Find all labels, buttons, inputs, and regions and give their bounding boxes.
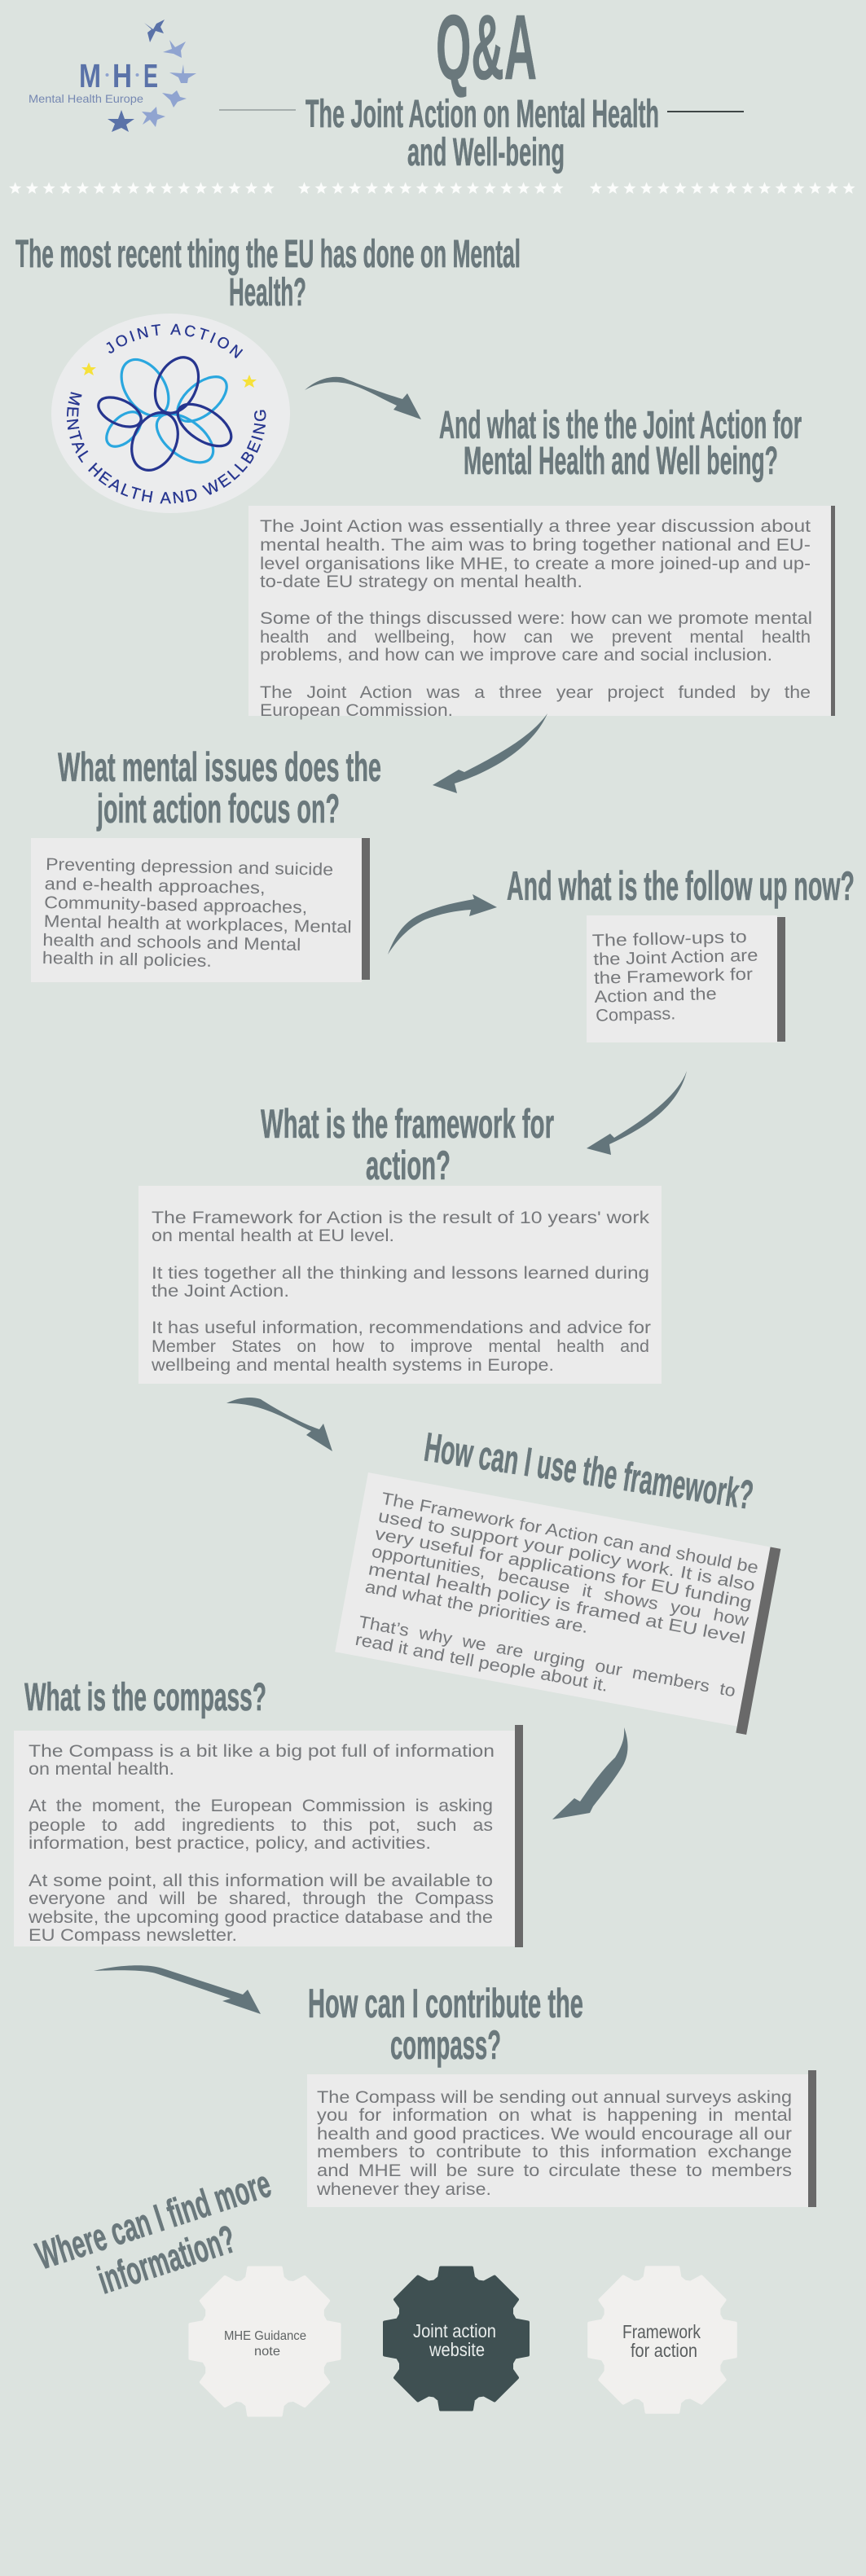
icon: dark star — [108, 110, 134, 132]
panel: compass answer: website, the upcoming good practice database and the — [28, 1908, 493, 1927]
panel: contributing answer: health and good practices. We would encourage all our — [317, 2125, 792, 2144]
panel: follow up answer: Action and the — [594, 985, 717, 1007]
panel: using the framework answer: The Framework for Action can and should be — [380, 1490, 760, 1578]
panel: mental issues answer: Preventing depression and suicide — [46, 855, 333, 880]
icon: light star 4 — [142, 107, 165, 127]
panel: using the framework answer: That’s why we are urging our members to — [357, 1613, 737, 1701]
panel: contributing answer: members to contribute to this information exchange — [317, 2143, 792, 2161]
panel: follow up answer: Compass. — [596, 1004, 676, 1025]
heading: where can I find more information: Where can I find more — [31, 2162, 276, 2278]
arrow: logo to Joint Action — [305, 377, 421, 419]
panel: Joint Action answer: mental health. The aim was to bring together national and EU- — [260, 536, 811, 555]
panel: contributing answer — [307, 2070, 816, 2207]
panel: mental issues answer: health and schools and Mental — [42, 931, 301, 954]
subtitle — [219, 93, 744, 174]
logo letters: E — [143, 57, 158, 94]
panel: compass answer — [14, 1725, 523, 1947]
panel: framework answer — [138, 1186, 662, 1384]
logo letters: H — [112, 57, 132, 94]
heading: how can I contribute: compass? — [390, 2022, 501, 2068]
panel: compass answer: The Compass is a bit like a big pot full of information — [29, 1742, 495, 1761]
panel: framework answer: It has useful information, recommendations and advice for — [152, 1319, 651, 1337]
heading: where can I find more information — [31, 2162, 276, 2302]
gear: MHE Guidance note: note — [254, 2345, 280, 2359]
panel: contributing answer: The Compass will be sending out annual surveys asking — [317, 2088, 792, 2107]
panel: using the framework answer — [334, 1472, 780, 1735]
gear: MHE Guidance note: MHE Guidance — [224, 2329, 306, 2343]
heading: framework for action: action? — [366, 1143, 451, 1188]
panel: using the framework answer: mental health policy is framed at EU level — [367, 1560, 747, 1648]
heading: most recent thing — [15, 233, 521, 314]
panel: compass answer: information, best practice, policy, and activities. — [29, 1834, 431, 1853]
logo letters: M — [79, 57, 101, 94]
arrow: to compass — [552, 1727, 628, 1819]
panel: framework answer: wellbeing and mental health systems in Europe. — [151, 1356, 554, 1375]
panel: mental issues answer: and e-health approaches, — [44, 875, 266, 897]
panel: follow up answer — [587, 915, 785, 1042]
panel: using the framework answer: and what the priorities are. — [363, 1578, 590, 1637]
gear: Joint action website: Joint action — [413, 2320, 496, 2341]
heading: how can I contribute — [308, 1981, 583, 2068]
gear: Joint action website: website — [429, 2339, 485, 2360]
panel: framework answer: on mental health at EU level. — [152, 1227, 394, 1245]
gear: Joint action website — [385, 2267, 528, 2409]
panel: follow up answer: the Framework for — [594, 965, 753, 988]
panel: Joint Action answer: health and wellbeing, how can we prevent mental health — [260, 628, 811, 647]
arrow: to using the framework — [226, 1398, 332, 1451]
icon: bird — [144, 20, 165, 42]
heading: mental issues: What mental issues does the — [58, 744, 381, 790]
logo: Mental Health Europe — [29, 20, 196, 132]
panel: framework answer: Member States on how to improve mental health and — [152, 1337, 649, 1356]
arrow: to mental issues — [433, 713, 547, 793]
panel: Joint Action answer: Some of the things discussed were: how can we promote mental — [260, 609, 812, 628]
panel: compass answer: on mental health. — [29, 1760, 174, 1779]
panel: compass answer: At the moment, the European Commission is asking — [29, 1797, 493, 1815]
heading: mental issues: joint action focus on? — [96, 786, 340, 832]
panel: Joint Action answer: to-date EU strategy on mental health. — [260, 573, 582, 591]
panel: using the framework answer: opportunities, because it shows you how — [370, 1543, 751, 1630]
panel: Joint Action answer: European Commission. — [260, 701, 453, 720]
panel: compass answer: everyone and will be shared, through the Compass — [29, 1889, 494, 1908]
panel: framework answer: the Joint Action. — [152, 1282, 289, 1301]
logo letters — [79, 57, 158, 94]
heading: where can I find more information: information? — [93, 2218, 241, 2302]
panel: using the framework answer: used to support your policy work. It is also — [376, 1507, 757, 1595]
panel: Joint Action answer: The Joint Action was a three year project funded by the — [260, 683, 811, 702]
logo name: Mental Health Europe — [29, 92, 143, 105]
icon: light star 3 — [162, 90, 187, 108]
panel: Joint Action answer: level organisations like MHE, to create a more joined-up and up- — [260, 555, 811, 573]
panel: using the framework answer: very useful for applications for EU funding — [373, 1525, 754, 1613]
panel: contributing answer: and MHE will be sure to circulate these to members — [317, 2161, 792, 2180]
heading: framework for action — [261, 1101, 554, 1188]
heading: most recent thing: Health? — [229, 271, 306, 314]
panel: framework answer: The Framework for Action is the result of 10 years' work — [152, 1209, 650, 1227]
heading: how can I contribute: How can I contribute the — [308, 1981, 583, 2026]
panel: Joint Action answer: The Joint Action was essentially a three year discussion about — [260, 517, 811, 536]
panel: follow up answer: The follow-ups to — [592, 928, 747, 950]
panel: using the framework answer: read it and tell people about it. — [354, 1630, 609, 1696]
panel: Joint Action answer: problems, and how can we improve care and social inclusion. — [260, 646, 772, 665]
panel: follow up answer: the Joint Action are — [593, 946, 758, 969]
icon: light star 2 — [169, 64, 196, 83]
star divider — [7, 182, 857, 195]
icon: light star 1 — [163, 40, 186, 58]
gear: Framework for action — [589, 2267, 736, 2412]
panel: compass answer: people to add ingredients to this pot, such as — [29, 1816, 493, 1835]
gear: MHE Guidance note — [190, 2268, 340, 2415]
heading: framework for action: What is the framework for — [261, 1101, 554, 1147]
panel: mental issues answer: health in all policies. — [42, 949, 212, 971]
gear: Framework for action: for action — [631, 2340, 697, 2361]
panel: compass answer: At some point, all this information will be available to — [29, 1872, 493, 1890]
arrow: to contributing — [94, 1965, 261, 2014]
panel: Joint Action answer — [248, 506, 835, 720]
arrow: to follow up — [388, 894, 497, 954]
badge: Joint Action logo: MENTAL HEALTH AND WELLBEING — [67, 392, 266, 503]
badge: Joint Action logo — [51, 314, 290, 513]
gear: Framework for action: Framework — [622, 2321, 701, 2342]
panel: compass answer: EU Compass newsletter. — [29, 1926, 237, 1945]
panel: mental issues answer: Community-based approaches, — [44, 893, 307, 917]
heading: what is the compass: What is the compass? — [24, 1676, 266, 1719]
subtitle: and Well-being — [407, 131, 565, 174]
heading: what is the Joint Action — [439, 404, 802, 483]
arrow: to framework — [587, 1071, 687, 1155]
badge: Joint Action logo: JOINT ACTION — [106, 324, 243, 358]
panel: mental issues answer — [31, 838, 370, 982]
panel: contributing answer: you for information on what is happening in mental — [317, 2106, 792, 2125]
panel: framework answer: It ties together all the thinking and lessons learned during — [152, 1264, 649, 1283]
panel: mental issues answer: Mental health at workplaces, Mental — [44, 912, 352, 937]
heading: mental issues — [58, 744, 381, 832]
panel: contributing answer: whenever they arise. — [316, 2180, 491, 2199]
